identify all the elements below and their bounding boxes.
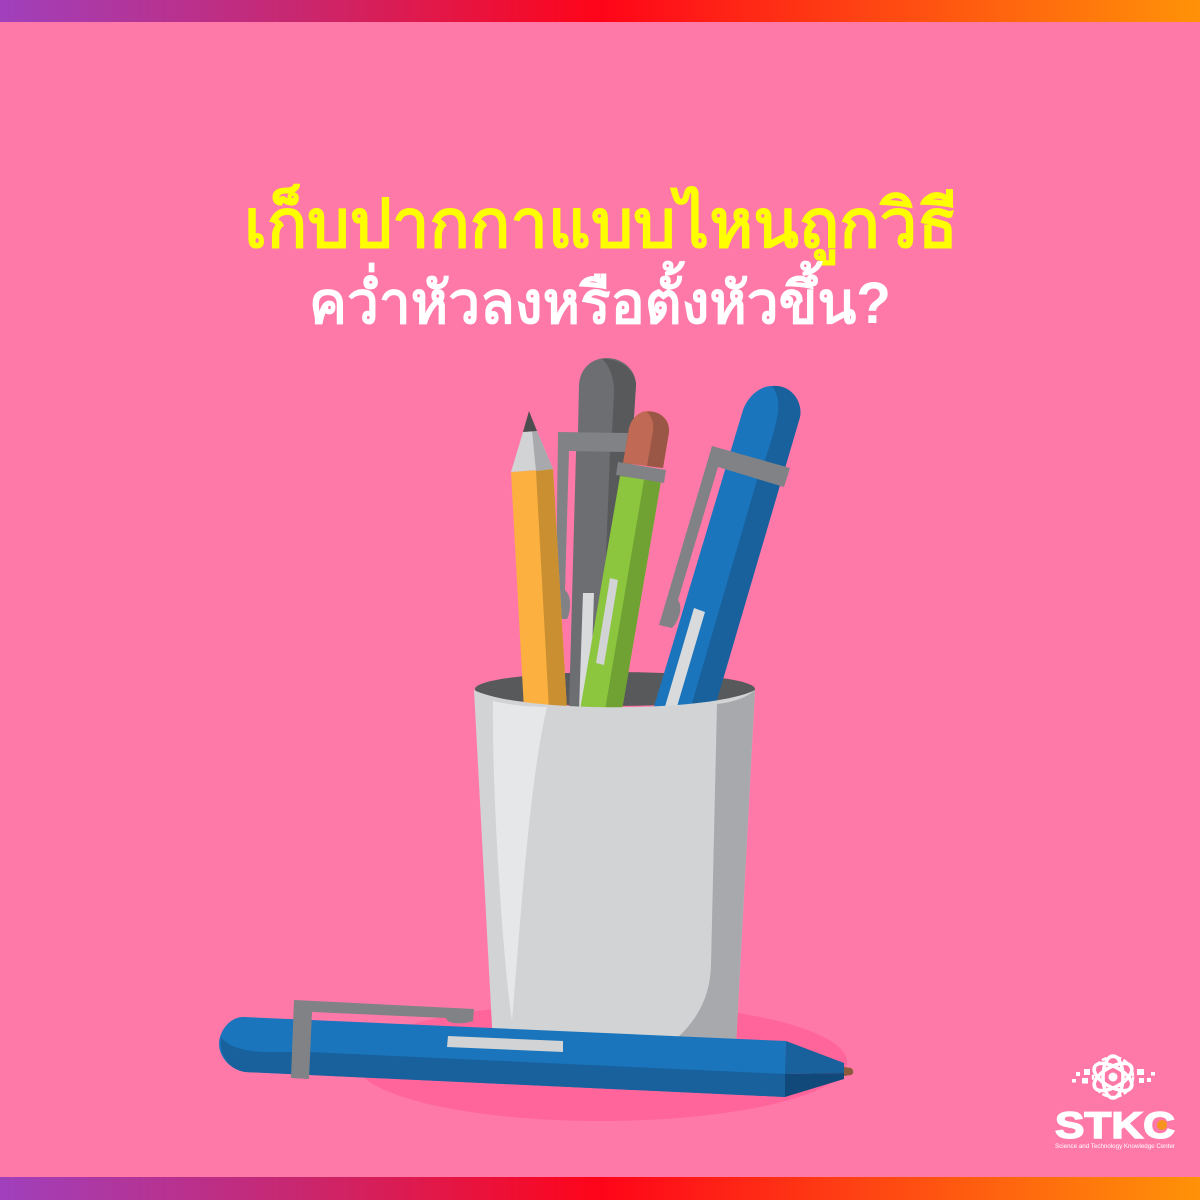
logo: STKC	[1055, 1056, 1175, 1150]
cup interior	[475, 672, 755, 706]
logo accent dot	[1157, 1120, 1167, 1130]
title: เก็บปากกาแบบไหนถูกวิธี	[244, 183, 958, 266]
gray pen	[556, 358, 636, 710]
logo wordmark: STKC	[1055, 1105, 1175, 1146]
logo atom icon	[1072, 1056, 1155, 1098]
bottom gradient bar	[0, 1177, 1200, 1200]
pencil	[511, 411, 567, 710]
cup	[474, 690, 755, 1045]
subtitle: คว่ำหัวลงหรือตั้งหัวขึ้น?	[309, 261, 891, 336]
blue pen	[653, 386, 800, 710]
lying blue pen	[219, 1000, 853, 1097]
green pen	[580, 411, 669, 710]
top gradient bar	[0, 0, 1200, 22]
table shadow	[355, 1003, 847, 1121]
logo tagline: Science and Technology Knowledge Center	[1055, 1144, 1175, 1150]
